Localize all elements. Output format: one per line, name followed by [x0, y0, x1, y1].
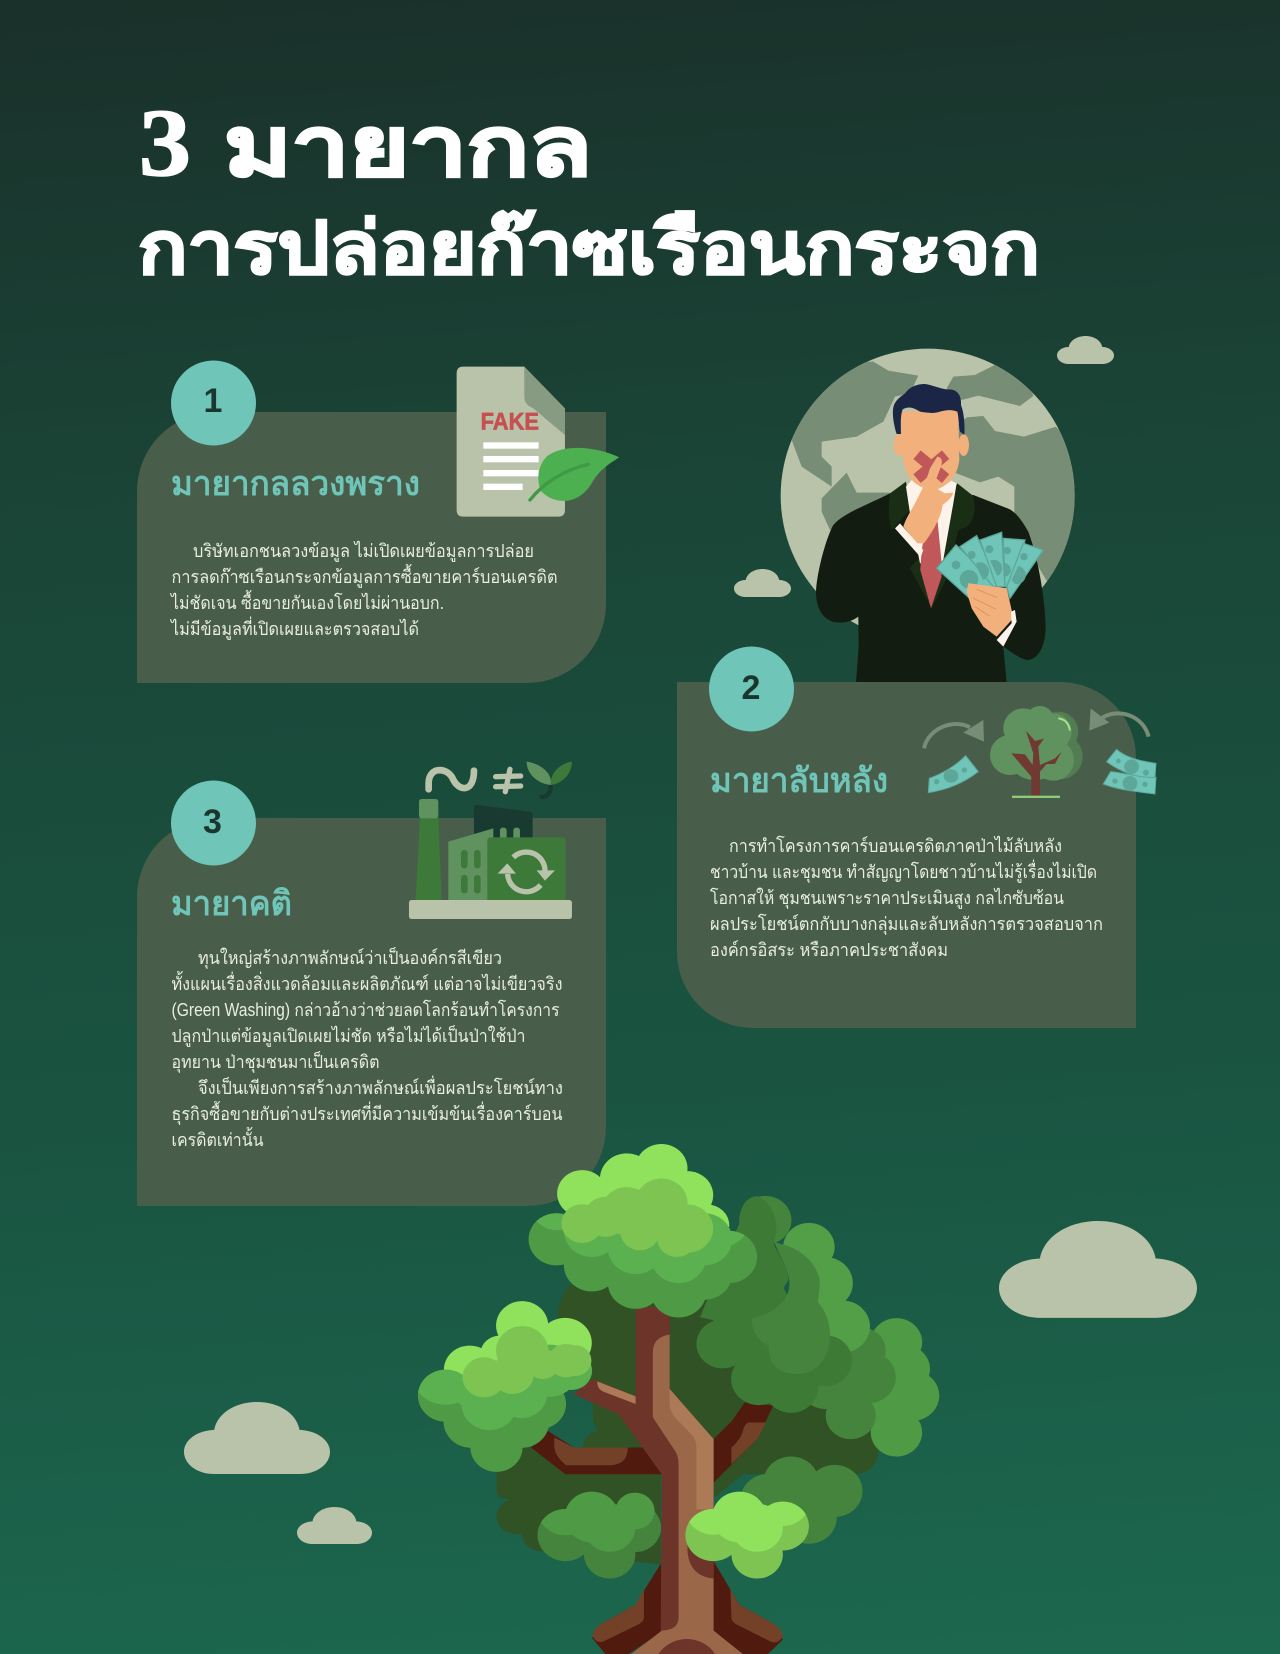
lower right bright canopy: [685, 1492, 809, 1578]
body text 2: องค์กรอิสระ หรือภาคประชาสังคม: [710, 940, 948, 960]
heading 3: มายาคติ: [171, 885, 292, 923]
body text 3: จึงเป็นเพียงการสร้างภาพลักษณ์เพื่อผลประโยชน์ทาง: [198, 1075, 563, 1098]
man: [816, 384, 1046, 683]
number badge 2: 2: [742, 669, 760, 707]
body text 1: [169, 540, 557, 640]
title: การปล่อยก๊าซเรือนกระจก: [138, 209, 1040, 289]
icon: money flowing around tree: [924, 706, 1156, 798]
icon: fake document with leaf: [457, 367, 619, 517]
icon: green-washed factory: [409, 762, 572, 919]
back foliage: [496, 1284, 879, 1564]
trunk: [619, 1307, 743, 1654]
body text 3: ทั้งแผนเรื่องสิ่งแวดล้อมและผลิตภัณฑ์ แต่อาจไม่เขียวจริง: [172, 971, 562, 994]
title: มายากล: [224, 102, 592, 193]
number badge 3: [171, 780, 256, 866]
cloud: small left: [297, 1507, 372, 1544]
number badge 1: 1: [204, 382, 222, 420]
cloud: medium left: [184, 1402, 330, 1474]
lower right dark canopy: [741, 1457, 862, 1544]
lower left canopy: [537, 1483, 661, 1579]
body text 2: ผลประโยชน์ตกกับบางกลุ่มและลับหลังการตรวจสอบจาก: [710, 913, 1103, 935]
left canopy: [411, 1301, 592, 1472]
globe: [780, 348, 1075, 626]
body text 1: การลดก๊าซเรือนกระจกข้อมูลการซื้อขายคาร์บอนเครดิต: [172, 564, 558, 588]
cloud: large right: [999, 1221, 1197, 1318]
cloud: beside globe: [734, 569, 791, 597]
body text 3: ทุนใหญ่สร้างภาพลักษณ์ว่าเป็นองค์กรสีเขียว: [198, 946, 502, 969]
heading 2: มายาลับหลัง: [710, 762, 888, 800]
body text 3: [172, 946, 563, 1150]
number badge 3: 3: [203, 803, 222, 841]
body text 3: ธุรกิจซื้อขายกับต่างประเทศที่มีความเข้มข้นเรื่องคาร์บอน: [172, 1101, 562, 1125]
body text 1: ไม่มีข้อมูลที่เปิดเผยและตรวจสอบได้: [169, 616, 419, 640]
cloud: top right: [1057, 336, 1114, 364]
fan of banknotes: [937, 532, 1043, 602]
number badge 2: [709, 646, 794, 732]
illustration: businessman shushing in front of globe: [780, 348, 1075, 682]
panel 2: hidden trick: [677, 646, 1156, 1028]
body text 1: ไม่ชัดเจน ซื้อขายกันเองโดยไม่ผ่านอบก.: [169, 590, 444, 613]
icon: fake document with leaf: FAKE: [481, 408, 539, 435]
panel 3: misconception: [137, 762, 606, 1206]
body text 2: ชาวบ้าน และชุมชน ทำสัญญาโดยชาวบ้านไม่รู้เรื่องไม่เปิด: [710, 859, 1097, 883]
body text 1: บริษัทเอกชนลวงข้อมูล ไม่เปิดเผยข้อมูลการปล่อย: [193, 540, 534, 562]
branches: [531, 1379, 773, 1483]
infographic canvas: [137, 110, 1197, 1654]
body text 2: การทำโครงการคาร์บอนเครดิตภาคป่าไม้ลับหลัง: [729, 835, 1062, 856]
title: [138, 89, 1040, 289]
body text 2: [710, 835, 1103, 960]
title: 3: [139, 89, 191, 196]
roots: [592, 1561, 783, 1654]
top canopy: [529, 1144, 757, 1317]
panel 1: deception: [137, 360, 619, 683]
hand holding money: [967, 583, 1017, 647]
body text 3: (Green Washing) กล่าวอ้างว่าช่วยลดโลกร้อนทำโครงการ: [172, 999, 560, 1020]
body text 3: ปลูกป่าแต่ข้อมูลเปิดเผยไม่ชัด หรือไม่ได้เป็นป่าใช้ป่า: [172, 1024, 526, 1047]
body text 3: อุทยาน ป่าชุมชนมาเป็นเครดิต: [172, 1050, 380, 1073]
illustration: large tree: [411, 1144, 939, 1654]
right canopy: [696, 1196, 939, 1457]
heading 1: มายากลลวงพราง: [171, 465, 420, 503]
number badge 1: [171, 360, 256, 446]
body text 3: เครดิตเท่านั้น: [172, 1127, 264, 1150]
body text 2: โอกาสให้ ชุมชนเพราะราคาประเมินสูง กลไกซับซ้อน: [710, 887, 1064, 909]
